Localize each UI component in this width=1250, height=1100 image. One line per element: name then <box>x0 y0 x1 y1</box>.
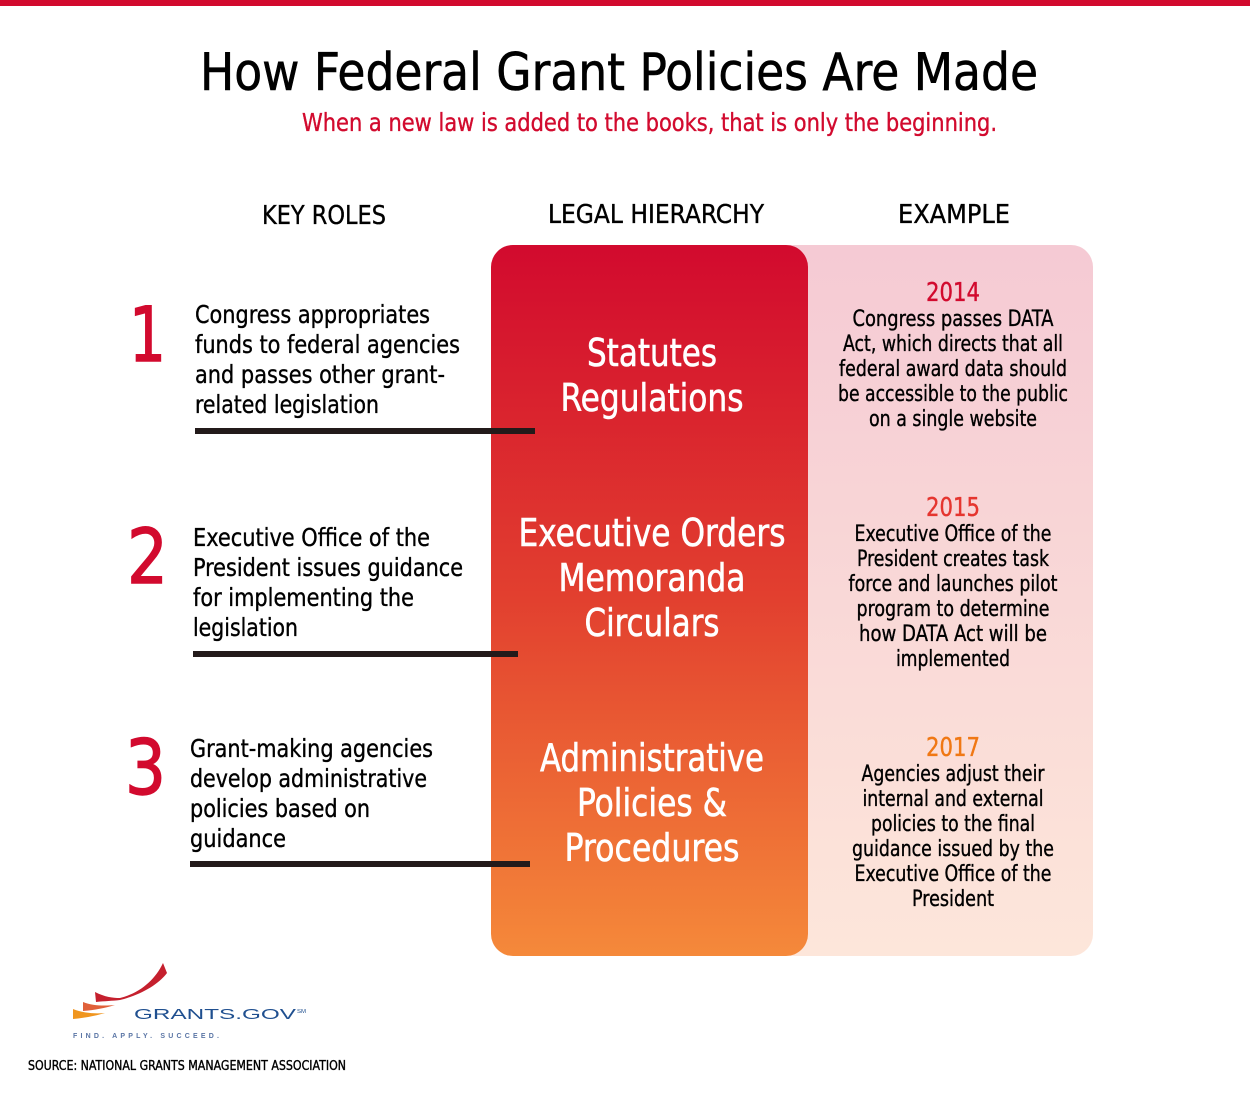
logo tagline: FIND. APPLY. SUCCEED. <box>73 1033 219 1040</box>
logo wordmark: GRANTS.GOV <box>134 1006 296 1023</box>
role 2 text: Executive Office of the <box>193 523 430 552</box>
example 2017: Executive Office of the <box>854 862 1052 887</box>
connector line 1 <box>195 428 535 434</box>
example 2017: President <box>912 887 994 912</box>
number 1: 1 <box>129 290 166 379</box>
example 2015: program to determine <box>856 597 1050 622</box>
example 2017: 2017 <box>926 733 980 763</box>
example 2014 <box>838 278 1068 432</box>
example 2015: President creates task <box>857 547 1049 572</box>
number 2: 2 <box>127 512 168 601</box>
role 3 text: guidance <box>190 824 286 853</box>
role 3 text: Grant-making agencies <box>190 734 433 763</box>
example 2015: 2015 <box>926 493 980 523</box>
example 2017: policies to the final <box>871 812 1035 837</box>
example 2015: force and launches pilot <box>848 572 1058 597</box>
example 2015 <box>848 493 1058 672</box>
example 2017 <box>852 733 1054 912</box>
example 2015: how DATA Act will be <box>859 622 1047 647</box>
example 2017: guidance issued by the <box>852 837 1054 862</box>
panel: example background <box>760 245 1093 956</box>
role 1 text: Congress appropriates <box>195 300 430 329</box>
role 1 text: and passes other grant- <box>195 360 445 389</box>
role 2 text: legislation <box>193 613 298 642</box>
example 2014: 2014 <box>926 278 980 308</box>
hierarchy level: administrative policies: Procedures <box>564 826 740 870</box>
role 1 text <box>195 300 460 419</box>
role 1 text: funds to federal agencies <box>195 330 460 359</box>
logo: Grants.gov <box>73 963 306 1040</box>
role 3 <box>125 723 433 853</box>
source note: SOURCE: NATIONAL GRANTS MANAGEMENT ASSOCIATION <box>28 1059 346 1074</box>
hierarchy level: executive orders: Circulars <box>584 601 720 645</box>
example 2017: internal and external <box>862 787 1044 812</box>
subtitle: When a new law is added to the books, that is only the beginning. <box>302 108 997 137</box>
hierarchy level: executive orders: Memoranda <box>558 556 746 600</box>
hierarchy level: administrative policies: Policies & <box>577 781 727 825</box>
hierarchy level: statutes: Regulations <box>560 376 744 420</box>
column heading: example: EXAMPLE <box>898 200 1010 230</box>
title: How Federal Grant Policies Are Made <box>200 43 1038 103</box>
connector line 3 <box>190 861 530 867</box>
example 2014: be accessible to the public <box>838 382 1068 407</box>
role 2 <box>127 512 463 642</box>
icon: logo swooshes <box>73 963 167 1019</box>
example 2014: Congress passes DATA <box>852 307 1054 332</box>
role 3 text: policies based on <box>190 794 370 823</box>
role 1 text: related legislation <box>195 390 379 419</box>
example 2014: federal award data should <box>839 357 1067 382</box>
example 2017: Agencies adjust their <box>862 762 1045 787</box>
example 2015: Executive Office of the <box>854 522 1052 547</box>
example 2014: on a single website <box>869 407 1037 432</box>
hierarchy level: administrative policies: Administrative <box>540 736 764 780</box>
role 2 text: for implementing the <box>193 583 414 612</box>
column heading: key roles: KEY ROLES <box>262 201 386 231</box>
number 3: 3 <box>125 723 166 812</box>
logo: Grants.gov: SM <box>297 1009 306 1015</box>
role 2 text <box>193 523 463 642</box>
hierarchy level: administrative policies <box>540 736 764 870</box>
hierarchy level: executive orders <box>518 511 786 645</box>
role 2 text: President issues guidance <box>193 553 463 582</box>
hierarchy level: executive orders: Executive Orders <box>518 511 786 555</box>
hierarchy level: statutes <box>560 331 744 420</box>
role 1 <box>129 290 460 419</box>
column heading: legal hierarchy: LEGAL HIERARCHY <box>548 200 765 230</box>
role 3 text: develop administrative <box>190 764 427 793</box>
connector line 2 <box>193 651 518 657</box>
example 2015: implemented <box>896 647 1010 672</box>
example 2014: Act, which directs that all <box>843 332 1063 357</box>
role 3 text <box>190 734 433 853</box>
panel: legal hierarchy <box>491 245 808 956</box>
hierarchy level: statutes: Statutes <box>587 331 717 375</box>
